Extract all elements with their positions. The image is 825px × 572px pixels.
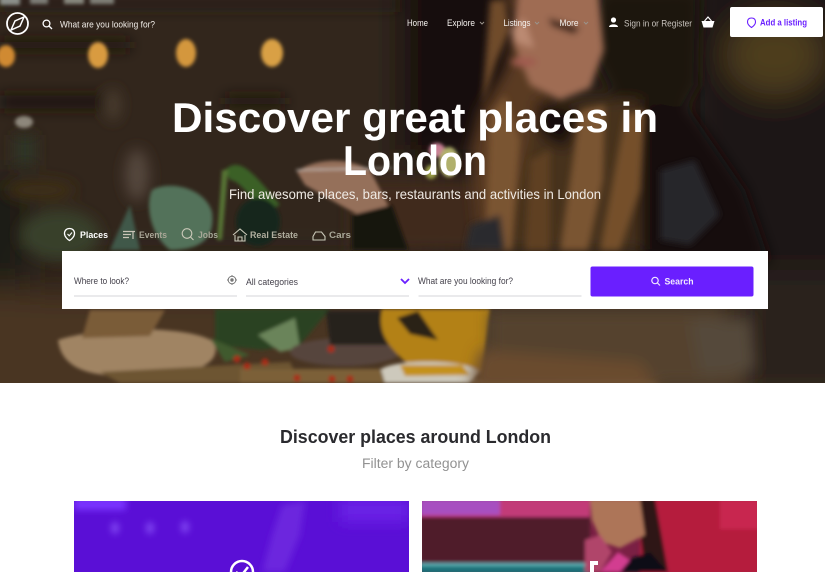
hero background photo (0, 0, 825, 420)
nav links (407, 18, 578, 29)
icon: compass logo (7, 13, 28, 34)
plants, hand and flower (110, 143, 459, 250)
icon: nav search (43, 20, 52, 29)
field: where to look: Where to look? (74, 276, 129, 287)
section subheading: Filter by category (362, 456, 469, 471)
icon: locate target (227, 275, 237, 285)
icon: shield pin (748, 18, 756, 28)
lower table scene (56, 309, 492, 383)
search button: Search (664, 276, 694, 288)
top navigation bar (7, 7, 823, 37)
field: where to look (74, 275, 237, 296)
search panel (62, 251, 768, 309)
add a listing button (730, 7, 823, 37)
category card: purple (74, 498, 409, 572)
icon: check circle (231, 561, 253, 572)
tab: jobs: Jobs (198, 230, 218, 241)
woman: hair, face, sweater (465, 0, 770, 262)
hero subtitle: Find awesome places, bars, restaurants and activities in London (229, 186, 601, 202)
tab: cars (313, 230, 351, 241)
icon: white glyph (590, 561, 598, 572)
search button (590, 266, 754, 296)
icon: dropdown chevron (401, 279, 409, 283)
sign in link: Sign in or Register (624, 18, 692, 30)
tab: places (64, 228, 108, 241)
nav links: Listings (504, 18, 531, 29)
hero title (172, 94, 658, 184)
field: what are you looking for: What are you looking for? (418, 276, 513, 287)
nav links: Home (407, 18, 428, 29)
icon: user (609, 17, 618, 27)
tab: events: Events (139, 230, 167, 241)
icon: basket (702, 17, 714, 28)
add a listing button: Add a listing (760, 18, 807, 28)
nav dropdown carets (480, 22, 588, 24)
tab: places: Places (80, 230, 108, 241)
listing type tabs (64, 228, 351, 241)
hero title: London (343, 137, 487, 184)
nav links: More (560, 18, 578, 29)
section heading: Discover places around London (280, 427, 551, 447)
tab: jobs (182, 229, 218, 241)
nav search placeholder: What are you looking for? (60, 20, 155, 30)
tab: real estate (233, 229, 298, 241)
pendant lights (0, 0, 283, 128)
woman figure (590, 499, 645, 548)
hero title: Discover great places in (172, 94, 658, 141)
category card: photo (420, 499, 760, 572)
tab: cars: Cars (329, 230, 351, 241)
field: all categories: All categories (246, 277, 298, 288)
field: all categories (246, 277, 409, 296)
sweater sleeve (470, 312, 755, 390)
tab: events (123, 230, 167, 241)
tab: real estate: Real Estate (250, 230, 298, 241)
nav links: Explore (447, 18, 475, 29)
